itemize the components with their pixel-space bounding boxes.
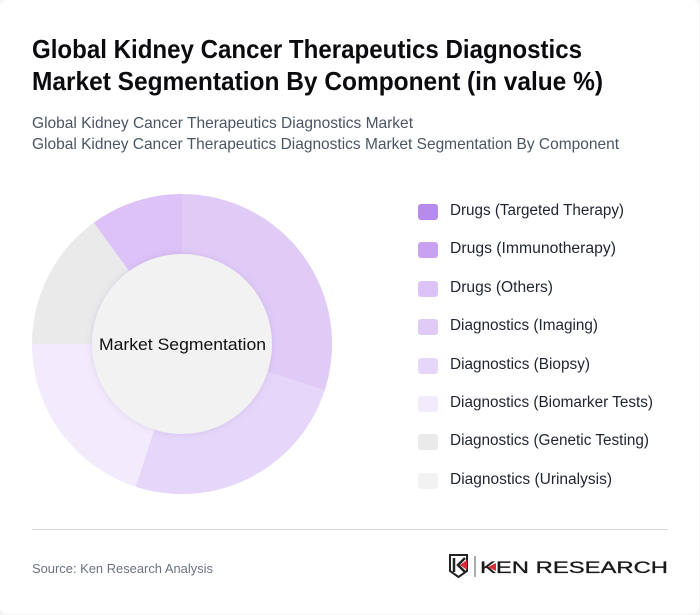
- legend item: Diagnostics (Imaging): Diagnostics (Imaging): [450, 317, 598, 334]
- icon: red notch: [488, 563, 496, 571]
- legend item: Diagnostics (Biomarker Tests): Diagnostics (Biomarker Tests): [450, 394, 653, 411]
- legend item: Drugs (Others): Drugs (Others): [450, 279, 553, 296]
- source note: Source: Ken Research Analysis: [32, 561, 213, 576]
- legend item: Drugs (Immunotherapy): Drugs (Immunotherapy): [450, 240, 616, 257]
- segment: 10%: [94, 194, 182, 344]
- subtitle: [32, 115, 620, 153]
- segment: 30%: [182, 194, 332, 390]
- segment: 15%: [32, 223, 182, 344]
- legend item: Diagnostics (Biopsy): Diagnostics (Biopsy): [450, 356, 590, 373]
- logo wordmark: KEN RESEARCH: [480, 558, 668, 577]
- donut centre: [92, 254, 272, 434]
- centre label: Market Segmentation: [99, 335, 266, 354]
- title: [32, 34, 603, 96]
- subtitle: Global Kidney Cancer Therapeutics Diagnostics Market Segmentation By Component: [32, 136, 620, 153]
- subtitle: Global Kidney Cancer Therapeutics Diagnostics Market: [32, 115, 414, 132]
- legend item: Diagnostics (Genetic Testing): Diagnostics (Genetic Testing): [450, 432, 649, 449]
- legend item: Diagnostics (Urinalysis): Diagnostics (Urinalysis): [450, 471, 612, 488]
- title: Global Kidney Cancer Therapeutics Diagnostics: [32, 34, 582, 64]
- logo: Ken Research: [450, 555, 668, 577]
- icon: shield: [450, 555, 467, 577]
- segment: 25%: [136, 344, 325, 494]
- segment: 20%: [32, 344, 182, 487]
- legend item: Drugs (Targeted Therapy): Drugs (Targeted Therapy): [450, 202, 624, 219]
- title: Market Segmentation By Component (in value %): [32, 66, 603, 96]
- donut chart: [32, 194, 332, 494]
- legend: [418, 202, 653, 489]
